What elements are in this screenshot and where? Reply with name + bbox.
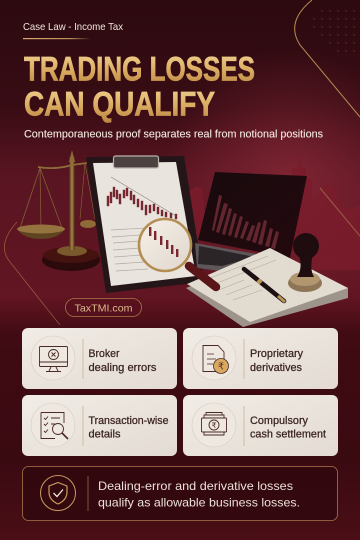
- card: Broker dealing errors: dealing errors: [88, 362, 157, 374]
- title: [24, 50, 255, 124]
- card: Transaction-wise details: Transaction-wise: [88, 415, 168, 427]
- icon: document with rupee coin: [203, 346, 228, 374]
- stamp: [288, 233, 322, 292]
- icon: banknotes: [202, 412, 226, 435]
- city skyline: [190, 156, 360, 270]
- magnifying glass: [139, 219, 216, 287]
- decorative gold curve left: [4, 222, 60, 325]
- icon: document with rupee coin: ₹: [218, 362, 224, 372]
- decorative gold curve top right: [295, 0, 360, 117]
- conclusion panel: Dealing-error and derivative losses: [98, 479, 293, 493]
- icon: checklist with magnifier: [41, 412, 68, 439]
- subtitle: Contemporaneous proof separates real from notional positions: [24, 128, 323, 140]
- card: Proprietary derivatives: [183, 328, 338, 389]
- dot pattern top right: [313, 10, 355, 52]
- eyebrow rule: [23, 38, 91, 39]
- icon: banknotes: ₹: [212, 421, 217, 430]
- eyebrow: Case Law - Income Tax: Case Law - Income Tax: [23, 21, 124, 33]
- card: Proprietary derivatives: derivatives: [250, 362, 302, 374]
- laptop with falling bar chart: [195, 172, 307, 275]
- document stack: [186, 248, 348, 327]
- clipboard with candlestick chart: [86, 156, 204, 293]
- card: Transaction-wise details: details: [88, 428, 121, 440]
- icon: monitor with error: [40, 346, 68, 372]
- website pill: TaxTMI.com: [66, 298, 142, 316]
- card: Compulsory cash settlement: [183, 395, 338, 456]
- conclusion panel: qualify as allowable business losses.: [98, 496, 300, 510]
- website pill: TaxTMI.com: TaxTMI.com: [74, 302, 133, 314]
- title: TRADING LOSSES: [24, 50, 255, 88]
- decorative gold curve right: [320, 188, 360, 236]
- icon: shield with check: [40, 476, 76, 510]
- icon: scales of justice: [17, 150, 100, 271]
- card: Broker dealing errors: [22, 328, 177, 389]
- card: Compulsory cash settlement: Compulsory: [250, 415, 308, 427]
- card: Transaction-wise details: [22, 395, 177, 456]
- card: Proprietary derivatives: Proprietary: [250, 348, 303, 360]
- candlestick chart: [107, 187, 177, 219]
- report lines: [111, 228, 148, 271]
- card: Compulsory cash settlement: cash settlement: [250, 428, 326, 440]
- card: Broker dealing errors: Broker: [88, 348, 120, 360]
- title: CAN QUALIFY: [24, 86, 215, 124]
- conclusion panel: [22, 466, 338, 520]
- pen: [244, 269, 285, 302]
